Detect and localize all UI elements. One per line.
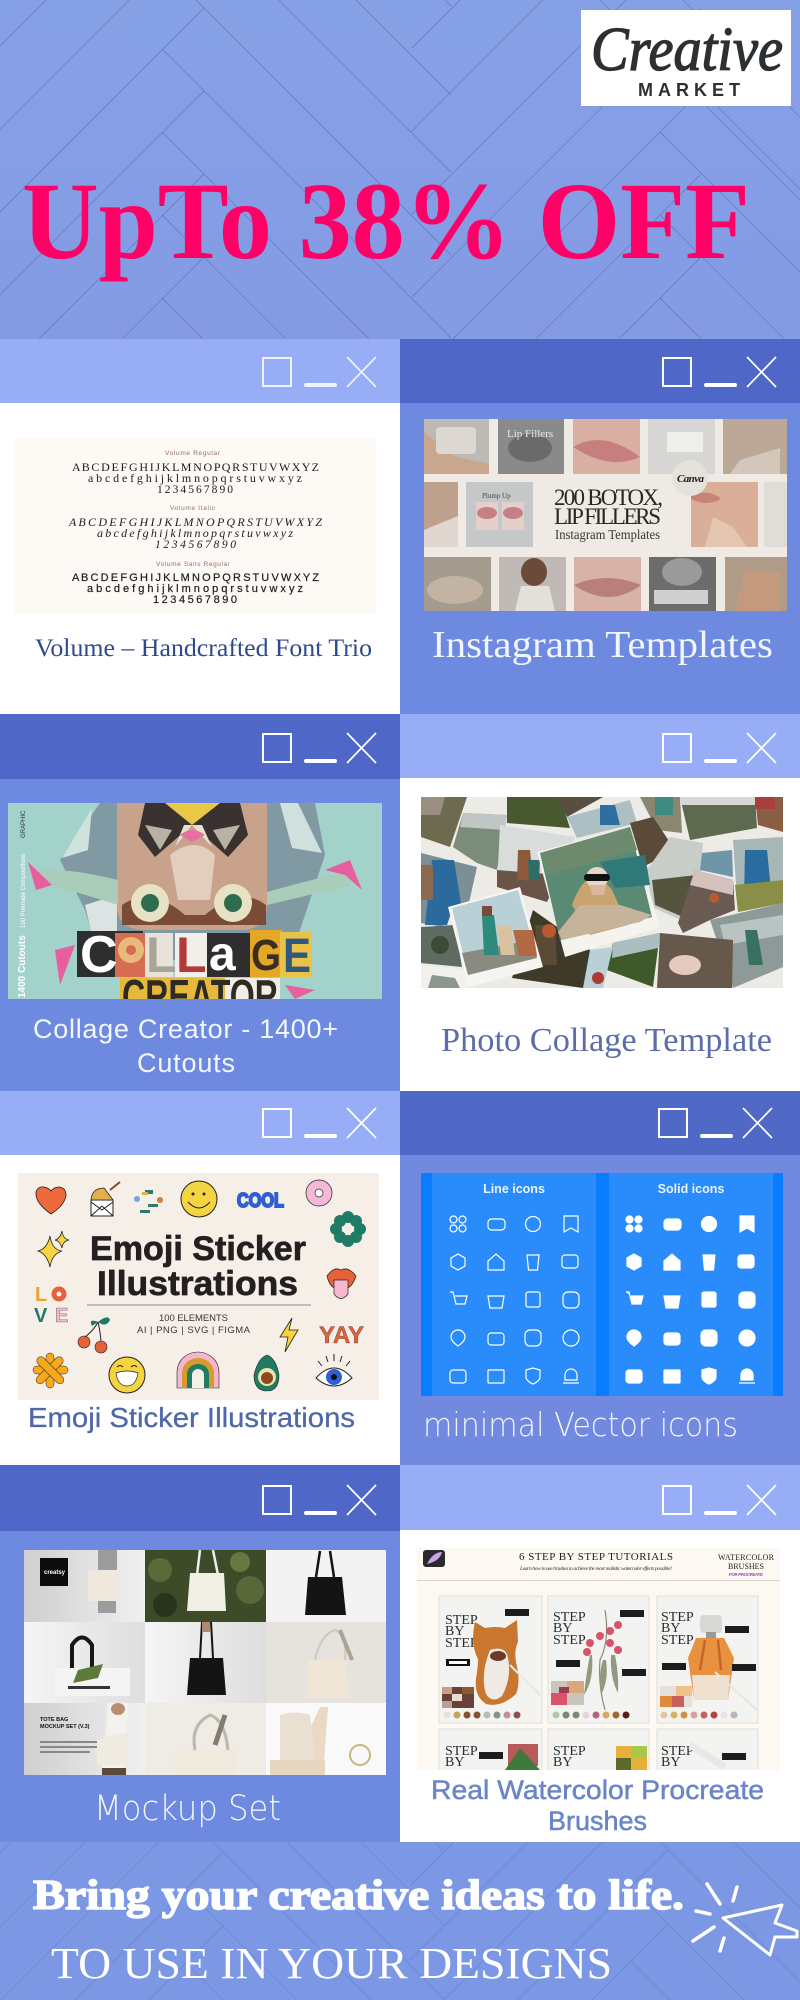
text: to use in your designs: TO USE IN YOUR DESIGNS	[51, 1939, 612, 1988]
image: emoji stickers: E	[55, 1305, 68, 1327]
panel: Photo collage template	[400, 714, 800, 1091]
image: collage creator artwork: L	[146, 927, 177, 983]
image: font specimen: 1 2 3 4 5 6 7 8 9 0	[157, 484, 233, 496]
caption	[33, 1014, 338, 1078]
image: watercolor brush tutorials: BY	[661, 1621, 680, 1636]
caption	[431, 1775, 764, 1836]
image: watercolor brush tutorials: STEP	[661, 1633, 694, 1648]
title: UpTo 38% OFF: UpTo 38% OFF	[22, 160, 750, 282]
image: watercolor brush tutorials: BY	[553, 1621, 572, 1636]
title bar with window controls	[0, 339, 400, 403]
heading: bring your creative ideas: Bring your creative ideas to life.	[33, 1873, 684, 1919]
image: line and solid icon sets: Solid icons	[658, 1182, 724, 1196]
image: font specimen: 1 2 3 4 5 6 7 8 9 0	[153, 594, 237, 606]
icon: cursor click	[691, 1882, 798, 1956]
image: emoji stickers: 100 ELEMENTS	[159, 1313, 228, 1324]
image: watercolor brush tutorials: STEP	[445, 1744, 478, 1759]
image: font specimen: A B C D E F G H I J K L M N O P Q R S T U V W X Y Z	[72, 572, 319, 584]
background: herringbone top banner	[0, 0, 800, 339]
caption: Instagram Templates	[432, 624, 773, 666]
image: emoji stickers: Illustrations	[97, 1265, 298, 1303]
image: botox and lip filler templates: Plump Up	[482, 492, 511, 500]
caption: Collage Creator - 1400+	[33, 1014, 338, 1044]
image: collage creator artwork: G	[251, 931, 281, 980]
image: emoji stickers: V	[34, 1305, 48, 1327]
image: watercolor brush tutorials: STEP	[661, 1744, 694, 1759]
image: watercolor brush tutorials: BY	[445, 1624, 464, 1639]
image: emoji stickers	[18, 1173, 379, 1400]
image: collage creator artwork: C	[80, 926, 118, 984]
image: collage creator artwork: 1400 Cutouts	[17, 935, 28, 998]
panel: Mockup set	[0, 1465, 400, 1842]
panel: Real watercolor procreate brushes	[400, 1465, 800, 1842]
image: font specimen: a b c d e f g h i j k l m n o p q r s t u v w x y z	[88, 471, 302, 485]
image: collage creator artwork: E	[283, 930, 311, 983]
image: font specimen: A B C D E F G H I J K L M N O P Q R S T U V W X Y Z	[72, 460, 319, 474]
image: tote bag mockups: creatsy	[44, 1570, 66, 1576]
caption: Volume – Handcrafted Font Trio	[35, 635, 372, 662]
panel: footer call to action	[0, 1842, 800, 2000]
image: watercolor brush tutorials: Learn how to use brushes to achieve the most realistic watercolor effects possible!	[519, 1565, 672, 1572]
image: font specimen: a b c d e f g h i j k l m n o p q r s t u v w x y z	[97, 526, 293, 540]
image: botox and lip filler templates: Instagram Templates	[555, 527, 660, 542]
image: polaroid photo collage	[421, 797, 783, 988]
title bar with window controls	[400, 1465, 800, 1530]
image: watercolor brush tutorials: BY	[445, 1755, 464, 1770]
image: watercolor brush tutorials: FOR PROCREATE	[729, 1572, 763, 1577]
image: watercolor brush tutorials: STEP	[553, 1633, 586, 1648]
title bar with window controls	[0, 1465, 400, 1531]
image: watercolor brush tutorials: 6 STEP BY STEP TUTORIALS	[519, 1551, 673, 1563]
image: watercolor brush tutorials: STEP	[553, 1744, 586, 1759]
logo: Creative Market: Creative	[591, 16, 783, 84]
image: line and solid icon sets: Line icons	[483, 1182, 545, 1196]
title bar with window controls	[400, 1091, 800, 1155]
image: font specimen: Volume Sans Regular	[156, 561, 231, 568]
title bar with window controls	[400, 339, 800, 403]
image: emoji stickers: L	[35, 1284, 47, 1306]
image: botox and lip filler templates: LIP FILLERS	[554, 504, 661, 529]
image: font specimen: Volume Regular	[165, 450, 221, 457]
panel: Instagram templates	[400, 339, 800, 714]
panel: Emoji sticker illustrations	[0, 1091, 400, 1465]
image: watercolor brush tutorials: STEP	[661, 1610, 694, 1625]
image: watercolor brush tutorials: BY	[661, 1755, 680, 1770]
title bar with window controls	[400, 714, 800, 778]
image: collage creator artwork: L	[176, 927, 207, 983]
caption: Brushes	[548, 1806, 647, 1836]
image: watercolor brush tutorials: STEP	[553, 1610, 586, 1625]
panel: minimal vector icons	[400, 1091, 800, 1465]
image: emoji stickers: AI | PNG | SVG | FIGMA	[137, 1325, 251, 1336]
image: collage creator artwork: GRAPHIC	[21, 810, 27, 838]
caption: Emoji Sticker Illustrations	[28, 1402, 355, 1433]
image: watercolor brush tutorials: STEP	[445, 1636, 478, 1651]
image: collage creator artwork: a	[209, 928, 236, 981]
image: watercolor brush tutorials: STEP	[445, 1613, 478, 1628]
caption: Real Watercolor Procreate	[431, 1775, 764, 1805]
image: collage creator artwork	[8, 803, 382, 999]
logo: Creative Market	[581, 10, 791, 106]
image: font specimen: Volume Italic	[170, 505, 216, 512]
image: botox and lip filler templates: 200 BOTOX,	[554, 485, 663, 510]
caption: Mockup Set	[94, 1789, 281, 1829]
image: font specimen: A B C D E F G H I J K L M N O P Q R S T U V W X Y Z	[68, 515, 322, 529]
image: botox and lip filler templates: Lip Fillers	[507, 428, 553, 440]
logo: Creative Market: MARKET	[638, 80, 740, 100]
title bar with window controls	[0, 1091, 400, 1155]
image: font specimen: 1 2 3 4 5 6 7 8 9 0	[155, 539, 236, 551]
image: collage creator artwork: 100 Premade Compositions	[21, 854, 27, 928]
image: watercolor brush tutorials: BRUSHES	[728, 1562, 764, 1571]
image: font specimen: a b c d e f g h i j k l m n o p q r s t u v w x y z	[87, 583, 303, 595]
panel: Volume font trio	[0, 339, 400, 714]
image: font specimen	[14, 439, 376, 613]
image: botox and lip filler templates	[424, 419, 787, 611]
image: tote bag mockups: MOCKUP SET (V.3)	[40, 1724, 90, 1730]
caption: Cutouts	[137, 1048, 235, 1078]
image: watercolor brush tutorials	[417, 1548, 780, 1770]
caption: Photo Collage Template	[441, 1022, 772, 1059]
image: tote bag mockups	[24, 1550, 386, 1775]
image: botox and lip filler templates: Canva	[677, 473, 704, 485]
image: emoji stickers: YAY	[319, 1322, 364, 1349]
image: watercolor brush tutorials: WATERCOLOR	[718, 1553, 775, 1562]
image: line and solid icon sets	[421, 1173, 783, 1396]
panel: Collage creator	[0, 714, 400, 1091]
title bar with window controls	[0, 714, 400, 779]
caption: minimal Vector icons	[423, 1405, 738, 1444]
image: watercolor brush tutorials: BY	[553, 1755, 572, 1770]
image: tote bag mockups: TOTE BAG	[40, 1717, 68, 1723]
image: emoji stickers: Emoji Sticker	[90, 1230, 306, 1268]
image: emoji stickers: COOL	[237, 1190, 284, 1212]
